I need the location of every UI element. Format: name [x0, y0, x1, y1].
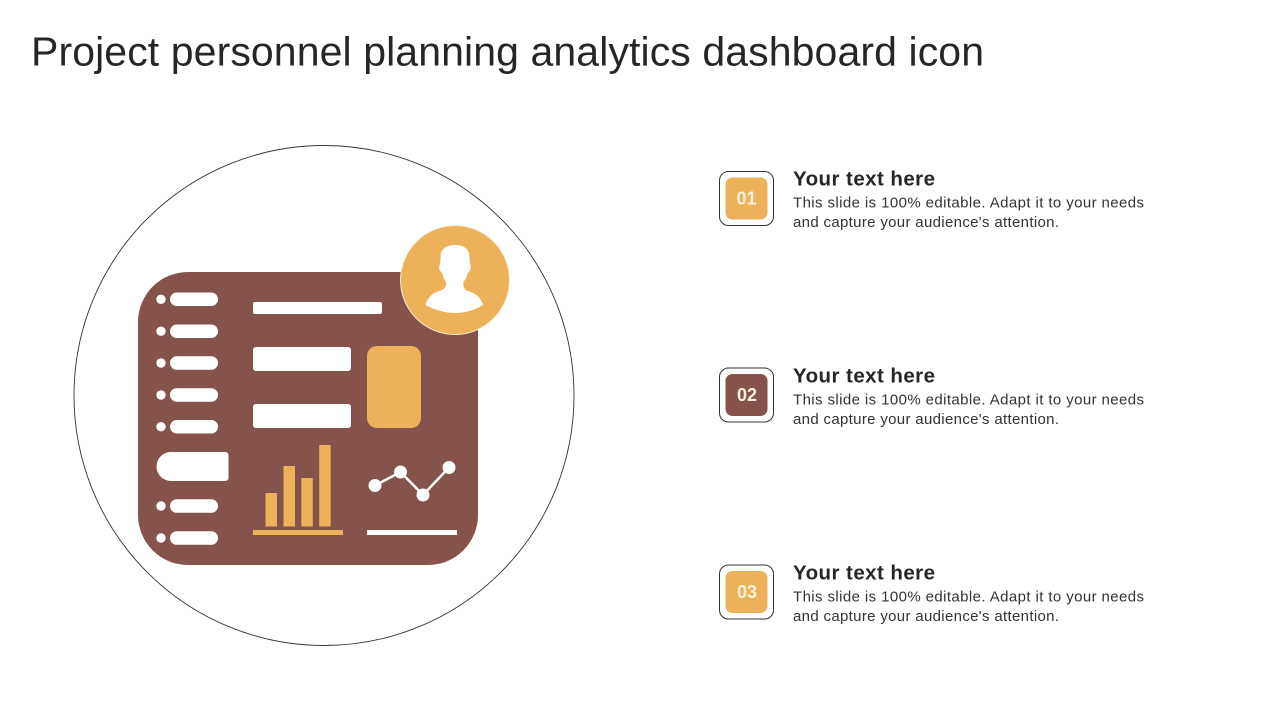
item heading: Your text here	[793, 168, 935, 190]
number badge 03	[720, 565, 774, 619]
item heading: Your text here	[793, 364, 935, 388]
item 03	[720, 562, 1144, 625]
item 02	[720, 364, 1144, 428]
bar chart	[253, 445, 343, 535]
icon: person silhouette	[426, 245, 483, 313]
large outline circle	[74, 146, 574, 646]
number badge 03: 03	[737, 582, 757, 602]
content bars	[253, 302, 382, 428]
item heading: Your text here	[793, 562, 935, 584]
item body: This slide is 100% editable. Adapt it to your needs	[793, 392, 1144, 408]
item body: This slide is 100% editable. Adapt it to your needs	[793, 588, 1144, 606]
sidebar menu	[156, 292, 228, 545]
line chart	[367, 461, 457, 535]
item body: and capture your audience's attention.	[793, 411, 1059, 428]
dashboard icon	[138, 226, 510, 565]
number badge 01: 01	[736, 188, 757, 208]
number badge 02: 02	[737, 385, 757, 405]
item body: This slide is 100% editable. Adapt it to your needs	[793, 194, 1144, 212]
item body: and capture your audience's attention.	[793, 608, 1059, 625]
title: Project personnel planning analytics dashboard icon	[31, 28, 984, 74]
profile badge	[400, 226, 510, 334]
dashboard card	[138, 272, 478, 565]
number badge 02	[720, 368, 774, 422]
item body: and capture your audience's attention.	[793, 214, 1059, 231]
gold panel	[367, 346, 421, 428]
item 01	[720, 168, 1144, 231]
number badge 01	[720, 172, 774, 226]
